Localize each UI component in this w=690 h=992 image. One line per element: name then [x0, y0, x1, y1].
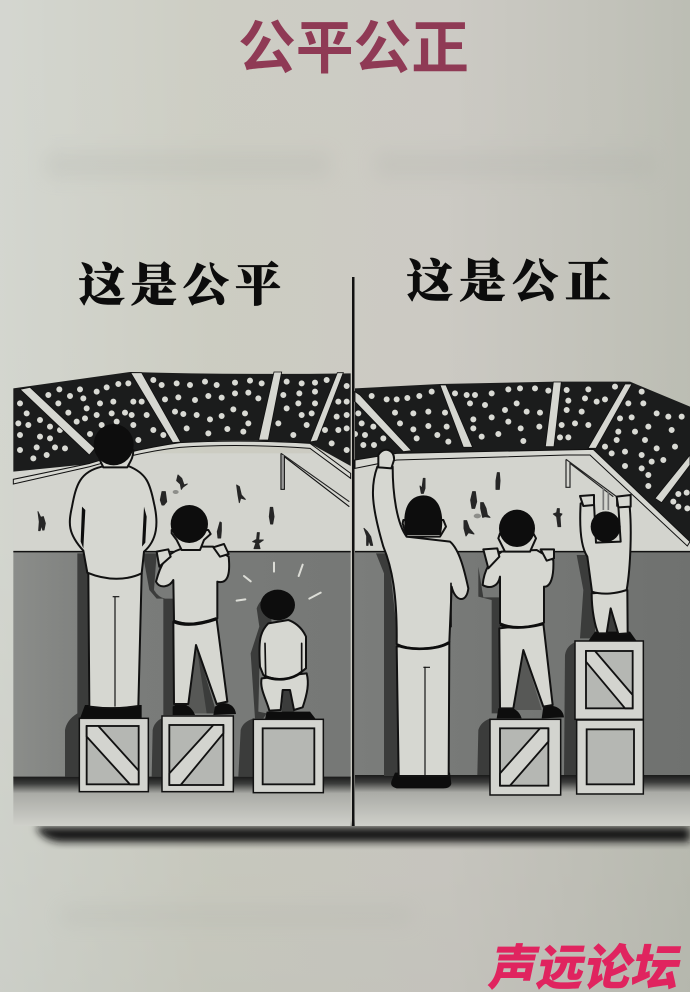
ground [13, 777, 351, 826]
top crate [575, 641, 643, 719]
heading: this is justice: 这是公正 [407, 256, 611, 307]
tall man [70, 424, 156, 718]
title: 公平公正 [238, 16, 469, 81]
crate 2 [162, 716, 233, 792]
figure shadows [376, 553, 618, 776]
bottom crate [577, 720, 643, 794]
stand struts [355, 382, 690, 546]
ground [355, 775, 690, 826]
tall man with raised arm [373, 450, 468, 788]
wall [355, 552, 690, 776]
faint show-through text bands [45, 152, 655, 924]
medium boy [156, 505, 236, 715]
field wedge under the stand edge [563, 450, 690, 553]
center divider line [352, 277, 354, 826]
crowd dots [18, 380, 347, 458]
book shadow under the illustration [36, 827, 690, 842]
heading: this is equality: 这是公平 [79, 260, 281, 311]
goal frame [281, 453, 349, 507]
stadium stand [355, 382, 690, 542]
field [355, 450, 690, 553]
crate under medium boy [490, 719, 561, 795]
wall [13, 552, 351, 778]
field players [38, 475, 274, 549]
small boy hanging from the wall [580, 495, 637, 641]
field [13, 453, 351, 553]
field players [364, 473, 562, 545]
panel: justice illustration [355, 382, 690, 826]
crowd dots [355, 387, 687, 508]
crate 1 [79, 718, 148, 792]
figure shadows [65, 553, 295, 777]
panel: equality illustration [13, 372, 351, 826]
stand struts [13, 372, 351, 484]
small boy [237, 563, 321, 719]
stadium stand [13, 372, 351, 472]
medium boy [483, 510, 564, 718]
crate 3 [253, 719, 323, 793]
goal frame [566, 459, 617, 510]
